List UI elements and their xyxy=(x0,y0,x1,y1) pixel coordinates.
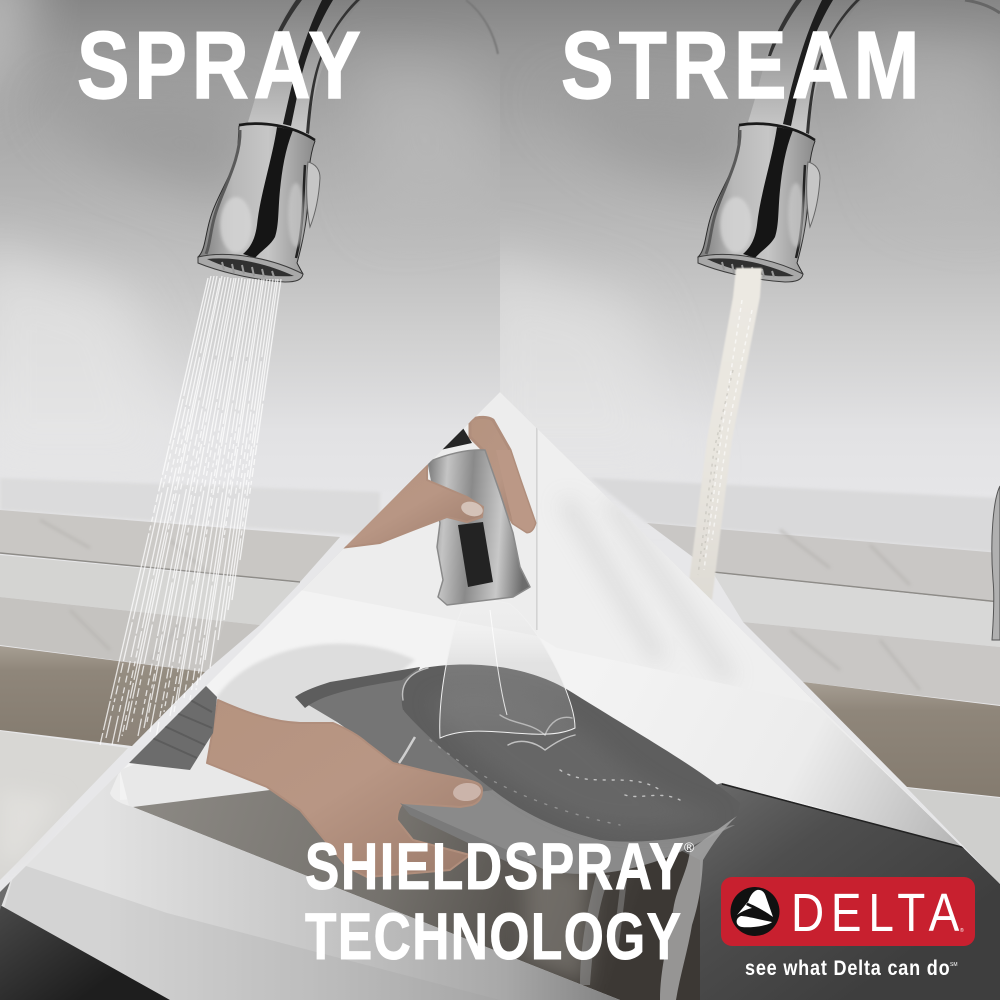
icon: Delta triangle mark xyxy=(730,887,780,936)
cabinet front below the counter xyxy=(0,905,170,1000)
water splash on plate xyxy=(403,668,680,825)
water cascade from plate xyxy=(580,816,737,1000)
tagline: SM xyxy=(950,962,958,968)
back counter surface xyxy=(590,478,1000,553)
plate xyxy=(295,665,740,874)
collar line xyxy=(239,124,315,140)
plate underside xyxy=(295,667,493,805)
black hose xyxy=(440,428,472,450)
spray button xyxy=(307,162,320,227)
water bell xyxy=(439,645,576,739)
marble ledge xyxy=(647,523,1000,603)
knit patch at left xyxy=(0,882,10,910)
heading: shieldspray technology: ® xyxy=(684,839,695,855)
title: SPRAY: SPRAY xyxy=(77,12,361,119)
icon: spray faucet xyxy=(198,0,362,282)
panel: stream background scene xyxy=(470,0,1000,900)
panel: spray background scene xyxy=(0,0,500,900)
sink interior left xyxy=(133,790,700,1000)
heading: shieldspray technology: SHIELDSPRAY xyxy=(305,829,683,903)
sprayer head xyxy=(428,450,530,605)
light lower counter xyxy=(907,788,1000,884)
hand holding sprayer xyxy=(340,417,535,605)
back counter surface xyxy=(0,478,380,537)
logo: Delta: DELTA xyxy=(791,883,960,943)
sink interior right xyxy=(682,783,1000,1000)
sink metal highlight xyxy=(525,860,590,985)
plate rim underneath xyxy=(400,790,735,874)
marble front xyxy=(743,622,1000,705)
thumb and palm xyxy=(340,465,483,548)
marble front xyxy=(0,597,260,672)
icon: stream faucet xyxy=(698,0,862,282)
panel: shieldspray centre scene xyxy=(0,380,1000,1000)
light lower counter xyxy=(0,731,128,880)
marble wall xyxy=(537,425,820,708)
head dark reflection xyxy=(243,127,293,258)
spray water jets xyxy=(100,276,282,745)
hand holding plate xyxy=(207,700,530,877)
plate edge over fingers xyxy=(400,803,530,868)
tagline: see what Delta can do xyxy=(745,957,950,980)
taupe cabinet sink xyxy=(803,682,1000,797)
white counter xyxy=(804,732,960,846)
heading: shieldspray technology: TECHNOLOGY xyxy=(305,899,681,973)
marble surface xyxy=(713,573,1000,647)
stream of water xyxy=(688,268,762,600)
knit sleeve xyxy=(129,686,217,770)
thumbnail xyxy=(453,783,481,801)
heading: shieldspray technology xyxy=(305,829,695,973)
neck xyxy=(248,0,362,134)
nozzle rim xyxy=(198,254,303,282)
marble ledge xyxy=(0,510,340,582)
counter top face xyxy=(0,770,620,1000)
water film on plate xyxy=(402,665,740,842)
sink basin far wall xyxy=(216,643,414,724)
sprayer button xyxy=(458,522,493,587)
logo: Delta xyxy=(721,877,975,946)
title: STREAM: STREAM xyxy=(561,12,919,119)
head body xyxy=(198,125,315,277)
head highlights xyxy=(220,197,252,253)
finger over sprayer xyxy=(496,450,535,532)
water dribble xyxy=(399,737,415,763)
counter edge shadow xyxy=(4,866,334,1000)
marble surface xyxy=(0,555,300,625)
taupe cabinet sink xyxy=(0,646,205,746)
logo: Delta: ® xyxy=(960,927,964,934)
fingers xyxy=(470,417,535,532)
icon: chrome faucet stem at right edge xyxy=(992,486,1000,640)
